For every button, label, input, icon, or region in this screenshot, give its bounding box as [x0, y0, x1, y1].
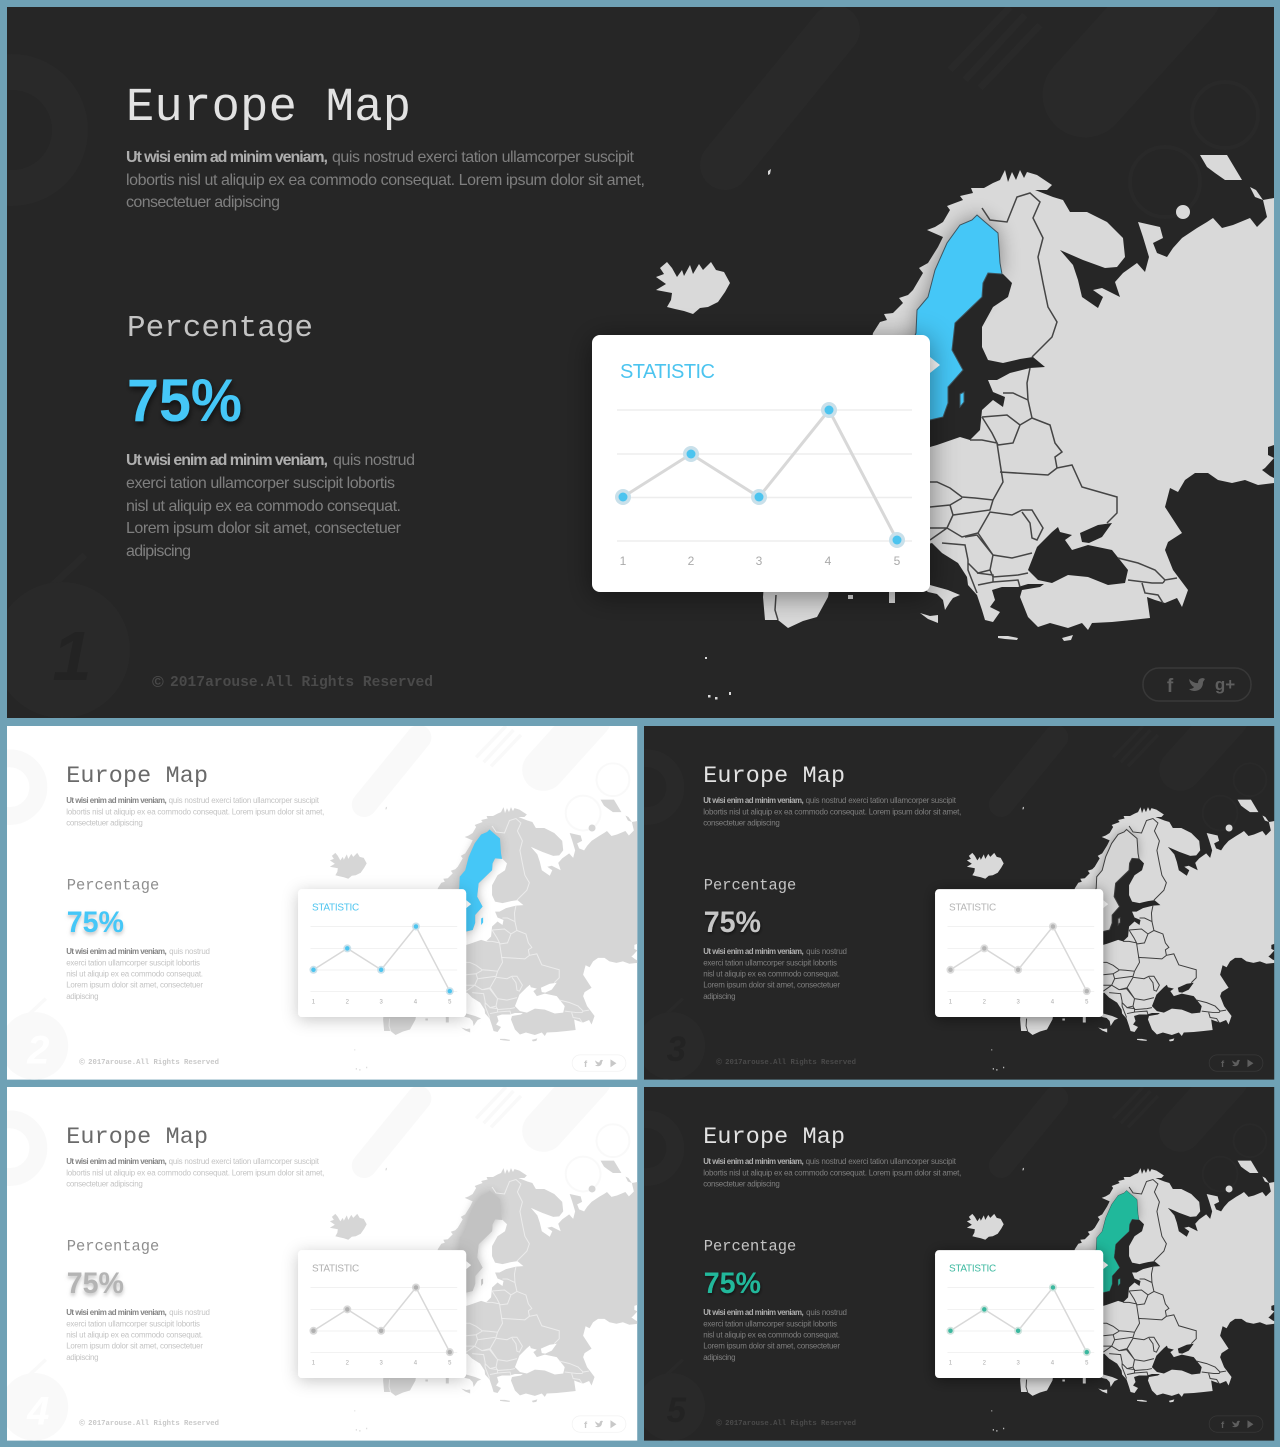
intro text	[703, 796, 961, 828]
intro text: Ut wisi enim ad minim veniam,	[126, 149, 328, 166]
intro text: quis nostrud exerci tation ullamcorper suscipit	[169, 796, 320, 805]
line chart: 4	[414, 1000, 418, 1006]
intro text: Ut wisi enim ad minim veniam,	[66, 1157, 167, 1166]
map of Europe	[330, 800, 637, 1071]
card heading: STATISTIC	[620, 361, 715, 383]
line chart: 3	[1016, 1000, 1020, 1006]
intro text: Ut wisi enim ad minim veniam,	[703, 796, 804, 805]
copyright footer: ©	[79, 1418, 85, 1427]
line chart: 4	[1051, 1000, 1055, 1006]
social icons pill	[1143, 668, 1251, 701]
panel: main dark slide, blue Sweden: 1	[53, 617, 91, 695]
description text: Lorem ipsum dolor sit amet, consectetuer	[66, 981, 203, 990]
line chart: 2	[983, 1361, 987, 1367]
description text: exerci tation ullamcorper suscipit lobortis	[66, 958, 200, 967]
highlighted country: Sweden	[1095, 828, 1140, 932]
description text: exerci tation ullamcorper suscipit lobortis	[126, 475, 395, 492]
panel: small dark slide, teal Sweden	[618, 1079, 1274, 1441]
social icons pill	[1209, 1416, 1263, 1432]
intro text: Ut wisi enim ad minim veniam,	[703, 1157, 804, 1166]
highlighted country: Sweden	[451, 1190, 502, 1297]
copyright footer: 2017arouse.All Rights Reserved	[88, 1420, 219, 1428]
description text: Lorem ipsum dolor sit amet, consectetuer	[703, 981, 840, 990]
percentage value: 75%	[127, 367, 242, 434]
intro text: quis nostrud exerci tation ullamcorper suscipit	[806, 796, 957, 805]
description text: exerci tation ullamcorper suscipit lobortis	[66, 1319, 200, 1328]
social icons pill: f	[1221, 1420, 1225, 1431]
statistic card	[298, 1250, 471, 1378]
percentage heading: Percentage	[127, 311, 313, 346]
description text	[126, 452, 415, 560]
intro text: consectetuer adipiscing	[126, 194, 280, 211]
copyright footer: 2017arouse.All Rights Reserved	[88, 1059, 219, 1067]
map of Europe	[330, 1161, 637, 1432]
line chart: 1	[312, 1361, 316, 1367]
copyright footer: ©	[79, 1057, 85, 1066]
description text: Ut wisi enim ad minim veniam,	[66, 1308, 167, 1317]
highlighted country: Sweden	[1088, 1190, 1139, 1297]
line chart: 4	[414, 1361, 418, 1367]
card heading: STATISTIC	[312, 903, 359, 914]
description text: Lorem ipsum dolor sit amet, consectetuer	[703, 1342, 840, 1351]
copyright footer: ©	[716, 1057, 722, 1066]
line chart: 2	[346, 1000, 350, 1006]
line chart: 3	[1016, 1361, 1020, 1367]
social icons pill: f	[584, 1420, 588, 1431]
line chart	[309, 923, 457, 1006]
social icons pill: f	[584, 1059, 588, 1070]
map of Europe	[656, 155, 1274, 700]
intro text: Ut wisi enim ad minim veniam,	[66, 796, 167, 805]
line chart: 1	[312, 1000, 316, 1006]
line chart: 4	[1051, 1361, 1055, 1367]
panel: small light slide, grey Sweden: 4	[26, 1389, 49, 1433]
description text: adipiscing	[703, 992, 736, 1001]
copyright footer: ©	[152, 674, 164, 691]
intro text: lobortis nisl ut aliquip ex ea commodo consequat. Lorem ipsum dolor sit amet,	[703, 1169, 961, 1178]
card heading: STATISTIC	[312, 1264, 359, 1275]
intro text: consectetuer adipiscing	[703, 819, 780, 828]
percentage heading: Percentage	[704, 877, 796, 895]
line chart: 5	[448, 1000, 452, 1006]
social icons pill: f	[1167, 676, 1174, 697]
highlighted country: Sweden	[458, 830, 502, 932]
social icons pill	[572, 1416, 626, 1432]
line chart: 5	[1085, 1000, 1089, 1006]
description text: nisl ut aliquip ex ea commodo consequat.	[126, 498, 401, 515]
line chart: 5	[1085, 1361, 1089, 1367]
description text: nisl ut aliquip ex ea commodo consequat.	[703, 1331, 840, 1340]
statistic card	[935, 889, 1108, 1017]
intro text	[703, 1157, 961, 1188]
description text: exerci tation ullamcorper suscipit lobortis	[703, 1319, 837, 1328]
description text: nisl ut aliquip ex ea commodo consequat.	[703, 970, 840, 979]
description text: quis nostrud	[169, 947, 210, 956]
description text: Lorem ipsum dolor sit amet, consectetuer	[66, 1342, 203, 1351]
title: Europe Map	[703, 764, 845, 790]
description text: Lorem ipsum dolor sit amet, consectetuer	[126, 520, 402, 537]
description text: adipiscing	[126, 543, 191, 560]
percentage heading: Percentage	[67, 877, 159, 895]
description text: quis nostrud	[806, 1308, 847, 1317]
line chart: 3	[756, 554, 763, 568]
intro text: quis nostrud exerci tation ullamcorper suscipit	[169, 1157, 320, 1166]
line chart	[615, 402, 912, 568]
panel: small light slide, grey Sweden	[0, 1079, 637, 1441]
intro text: quis nostrud exerci tation ullamcorper suscipit	[332, 149, 635, 166]
percentage heading: Percentage	[67, 1238, 159, 1256]
intro text: quis nostrud exerci tation ullamcorper suscipit	[806, 1157, 957, 1166]
copyright footer: 2017arouse.All Rights Reserved	[725, 1420, 856, 1428]
intro text: lobortis nisl ut aliquip ex ea commodo consequat. Lorem ipsum dolor sit amet,	[126, 172, 645, 189]
line chart: 2	[983, 1000, 987, 1006]
title: Europe Map	[66, 764, 208, 790]
title: Europe Map	[66, 1125, 208, 1151]
intro text: lobortis nisl ut aliquip ex ea commodo consequat. Lorem ipsum dolor sit amet,	[66, 1169, 324, 1178]
statistic card	[935, 1250, 1108, 1378]
description text: quis nostrud	[806, 947, 847, 956]
line chart: 3	[379, 1000, 383, 1006]
description text: exerci tation ullamcorper suscipit lobortis	[703, 958, 837, 967]
line chart: 5	[448, 1361, 452, 1367]
copyright footer: 2017arouse.All Rights Reserved	[725, 1059, 856, 1067]
panel: small light slide, blue Sweden	[0, 718, 637, 1080]
statistic card	[298, 889, 471, 1017]
line chart: 2	[346, 1361, 350, 1367]
line chart	[946, 923, 1094, 1006]
copyright footer: ©	[716, 1418, 722, 1427]
map of Europe	[967, 1161, 1274, 1432]
description text: adipiscing	[66, 1353, 99, 1362]
card heading: STATISTIC	[949, 903, 996, 914]
description text: Ut wisi enim ad minim veniam,	[66, 947, 167, 956]
panel: main dark slide, blue Sweden	[0, 0, 1274, 718]
statistic card	[592, 335, 940, 592]
intro text	[66, 796, 324, 828]
description text: nisl ut aliquip ex ea commodo consequat.	[66, 970, 203, 979]
line chart: 5	[894, 554, 901, 568]
percentage value: 75%	[704, 906, 761, 939]
description text: nisl ut aliquip ex ea commodo consequat.	[66, 1331, 203, 1340]
intro text: consectetuer adipiscing	[66, 1179, 143, 1188]
social icons pill: g+	[1215, 675, 1235, 694]
description text: adipiscing	[66, 992, 99, 1001]
social icons pill	[1209, 1055, 1263, 1071]
intro text: lobortis nisl ut aliquip ex ea commodo consequat. Lorem ipsum dolor sit amet,	[703, 808, 961, 817]
panel: small dark slide, teal Sweden: 5	[667, 1391, 687, 1430]
line chart	[309, 1283, 457, 1367]
description text: quis nostrud	[169, 1308, 210, 1317]
line chart: 3	[379, 1361, 383, 1367]
copyright footer: 2017arouse.All Rights Reserved	[170, 675, 433, 691]
social icons pill: f	[1221, 1059, 1225, 1070]
description text: Ut wisi enim ad minim veniam,	[126, 452, 328, 469]
intro text: lobortis nisl ut aliquip ex ea commodo consequat. Lorem ipsum dolor sit amet,	[66, 808, 324, 817]
percentage value: 75%	[704, 1267, 761, 1300]
line chart: 1	[620, 554, 627, 568]
panel: small dark slide, grey Sweden: 3	[667, 1030, 686, 1069]
title: Europe Map	[703, 1125, 845, 1151]
line chart: 2	[688, 554, 695, 568]
description text: Ut wisi enim ad minim veniam,	[703, 947, 804, 956]
intro text: consectetuer adipiscing	[66, 819, 143, 828]
panel: small light slide, blue Sweden: 2	[26, 1028, 49, 1072]
description text	[66, 1308, 210, 1362]
description text	[66, 947, 210, 1001]
line chart: 4	[825, 554, 832, 568]
percentage heading: Percentage	[704, 1238, 796, 1256]
highlighted country: Sweden	[914, 214, 1002, 420]
line chart: 1	[949, 1361, 953, 1367]
map of Europe	[967, 800, 1274, 1071]
intro text	[126, 149, 645, 211]
title: Europe Map	[126, 82, 411, 135]
intro text: consectetuer adipiscing	[703, 1179, 780, 1188]
description text: Ut wisi enim ad minim veniam,	[703, 1308, 804, 1317]
social icons pill	[572, 1055, 626, 1071]
description text: quis nostrud	[333, 452, 415, 469]
percentage value: 75%	[67, 1267, 124, 1300]
panel: small dark slide, grey Sweden	[618, 718, 1274, 1080]
description text	[703, 947, 847, 1001]
line chart: 1	[949, 1000, 953, 1006]
percentage value: 75%	[67, 906, 124, 939]
description text	[703, 1308, 847, 1362]
line chart	[946, 1283, 1094, 1367]
intro text	[66, 1157, 324, 1188]
description text: adipiscing	[703, 1353, 736, 1362]
card heading: STATISTIC	[949, 1264, 996, 1275]
